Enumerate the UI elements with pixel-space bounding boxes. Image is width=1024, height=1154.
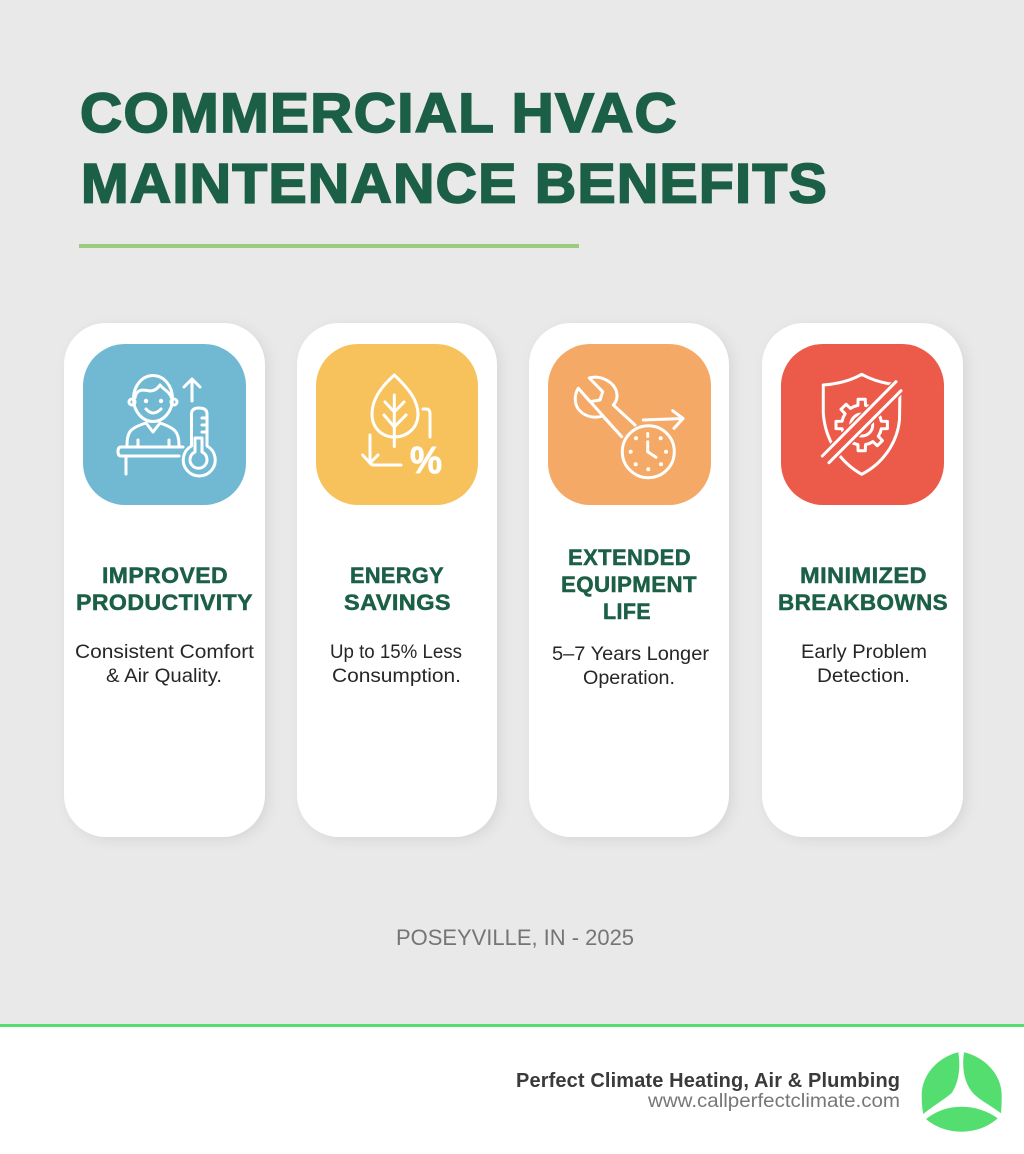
description (552, 643, 710, 689)
heading (778, 563, 948, 615)
company name: Perfect Climate Heating, Air & Plumbing (516, 1070, 900, 1092)
icon: wrench and clock (548, 344, 711, 505)
heading (561, 545, 697, 624)
description: Up to 15% Less (330, 641, 462, 663)
icon: leaf with percent (316, 344, 478, 505)
description (801, 641, 927, 687)
icon: leaf with percent: % (410, 440, 442, 482)
icon: shield with crossed gear (781, 344, 944, 505)
description: & Air Quality. (106, 665, 222, 687)
title: COMMERCIAL HVAC (80, 81, 678, 144)
heading (76, 563, 253, 615)
description: Detection. (817, 665, 910, 687)
location and year: POSEYVILLE, IN - 2025 (396, 925, 634, 950)
heading: SAVINGS (344, 590, 451, 615)
heading: ENERGY (350, 563, 444, 588)
description: Consumption. (332, 665, 461, 687)
description (330, 641, 462, 687)
heading: IMPROVED (102, 563, 228, 588)
panel: minimized breakdowns (762, 323, 963, 837)
description: Operation. (583, 667, 675, 689)
heading: EQUIPMENT (561, 572, 697, 597)
heading (344, 563, 451, 615)
description: Early Problem (801, 641, 927, 663)
panel: improved productivity (64, 323, 265, 837)
title (80, 81, 828, 214)
description (75, 641, 255, 687)
panel: energy savings (297, 323, 497, 837)
heading: LIFE (603, 599, 651, 624)
logo (922, 1052, 1002, 1132)
description: 5–7 Years Longer (552, 643, 710, 665)
panel: extended equipment life (529, 323, 729, 837)
website: www.callperfectclimate.com (647, 1090, 900, 1112)
title underline (79, 244, 579, 248)
description: Consistent Comfort (75, 641, 255, 663)
heading: MINIMIZED (800, 563, 927, 588)
title: MAINTENANCE BENEFITS (81, 152, 828, 214)
icon: person at desk with thermometer (83, 344, 246, 505)
heading: EXTENDED (568, 545, 691, 570)
footer band (0, 1024, 1024, 1154)
heading: PRODUCTIVITY (76, 590, 253, 615)
heading: BREAKBOWNS (778, 590, 948, 615)
